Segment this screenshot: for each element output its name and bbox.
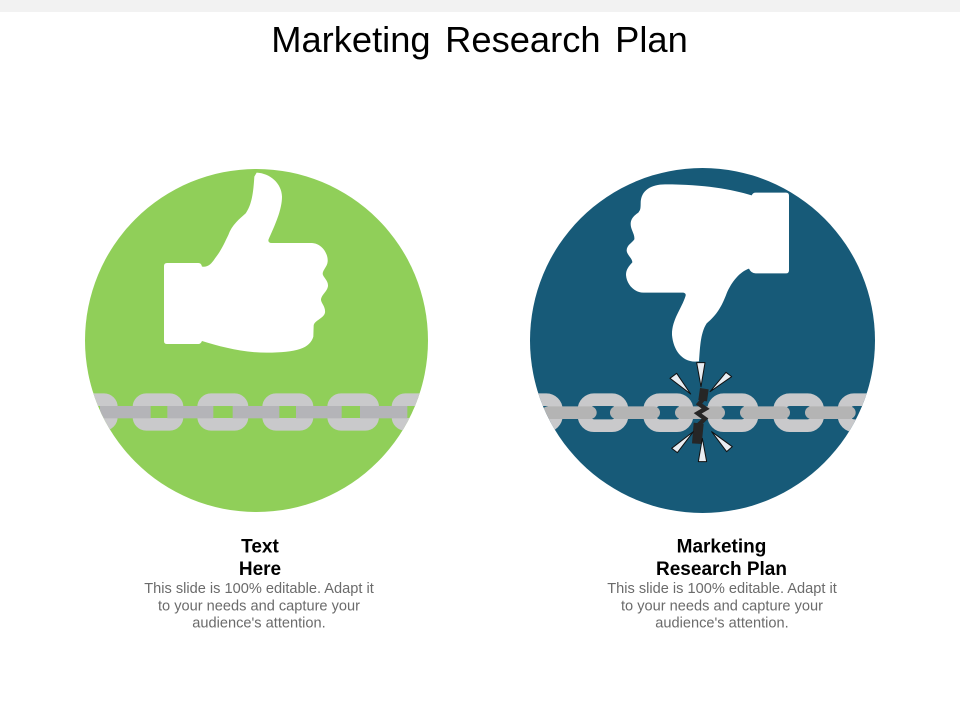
body: left description: audience's attention. — [192, 616, 326, 632]
heading: Text Here: Here — [239, 559, 281, 580]
text block: left caption — [144, 536, 374, 632]
heading: Text Here — [239, 536, 281, 580]
text block: right caption — [607, 536, 837, 632]
body: left description: This slide is 100% editable. Adapt it — [144, 581, 374, 597]
chain: broken — [518, 400, 882, 426]
panel: thumbs up circle — [73, 169, 436, 512]
title: Marketing Research Plan — [271, 19, 688, 60]
icon: thumbs down — [626, 184, 789, 362]
heading: Text Here: Text — [241, 536, 279, 558]
body: right description: audience's attention. — [655, 616, 789, 632]
heading: Marketing Research Plan — [656, 536, 787, 580]
heading: Marketing Research Plan: Research Plan — [656, 559, 787, 580]
body: left description — [144, 581, 374, 632]
panel: thumbs down circle — [518, 168, 882, 513]
icon: chain break burst — [670, 363, 732, 462]
body: left description: to your needs and capture your — [158, 598, 360, 614]
body: right description: to your needs and capture your — [621, 598, 823, 614]
icon: thumbs up — [164, 173, 328, 353]
chain: unbroken — [73, 400, 436, 424]
heading: Marketing Research Plan: Marketing — [677, 536, 766, 558]
body: right description: This slide is 100% editable. Adapt it — [607, 581, 837, 597]
body: right description — [607, 581, 837, 632]
